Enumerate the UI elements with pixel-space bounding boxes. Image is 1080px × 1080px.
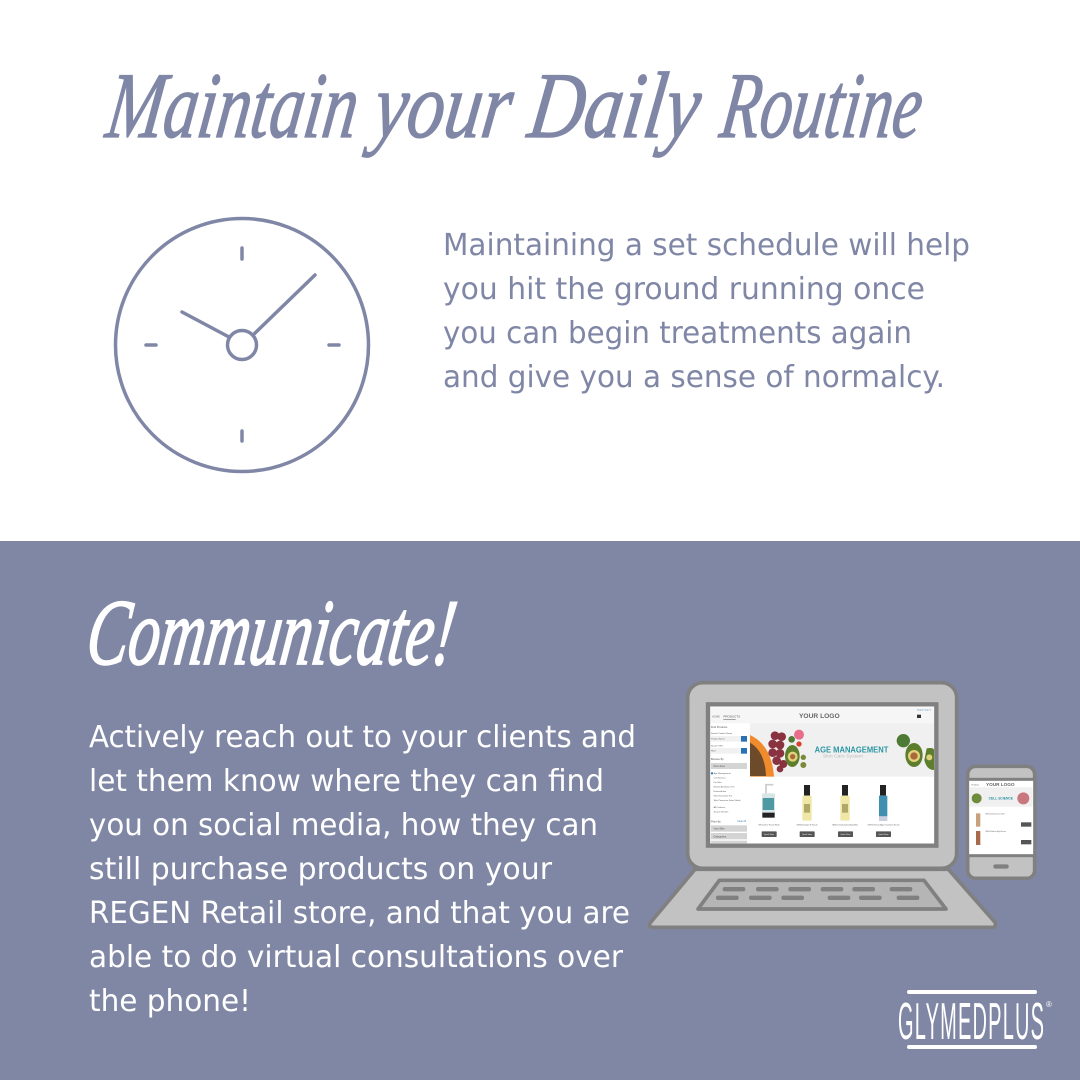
phone: Products xyxy=(971,783,979,786)
sidebar: SKU xyxy=(711,750,716,752)
product banner: Skin Care System xyxy=(823,754,863,760)
sidebar: Search SKU xyxy=(711,744,723,747)
phone: GM100 Retinol Night Serum xyxy=(985,830,1007,833)
laptop screen xyxy=(708,704,936,846)
text block: communicate: still purchase products on your xyxy=(89,852,553,887)
text block: communicate: REGEN Retail store, and that you are xyxy=(89,896,630,931)
product banner xyxy=(750,723,934,777)
product cards: Quick View xyxy=(878,834,889,836)
text block: communicate: let them know where they can find xyxy=(89,764,604,799)
product cards: Quick View xyxy=(764,834,775,836)
sidebar: Cell Science xyxy=(714,778,726,780)
text block: daily routine xyxy=(443,228,970,395)
phone xyxy=(968,766,1035,878)
sidebar: Retina Active xyxy=(714,790,727,793)
sidebar: Our Lines xyxy=(713,764,726,768)
laptop screen: PRODUCTS xyxy=(723,714,740,718)
title xyxy=(100,54,930,158)
text block: daily routine: Maintaining a set schedule will help xyxy=(443,228,970,263)
sidebar: Search Product Name xyxy=(711,732,733,735)
phone: GM100 Daily Science Mist xyxy=(985,812,1005,815)
text block: daily routine: you can begin treatments again xyxy=(443,316,912,351)
sidebar xyxy=(711,725,747,843)
laptop lid xyxy=(688,683,957,868)
laptop base xyxy=(649,869,995,927)
title: Routine xyxy=(714,54,930,158)
sidebar: Browse By xyxy=(711,757,724,761)
sidebar: Filter By xyxy=(711,819,721,823)
sidebar: For Men xyxy=(714,781,722,784)
title: Maintain xyxy=(100,54,366,158)
laptop screen: YOUR LOGO xyxy=(799,713,840,720)
sidebar: Clear All xyxy=(737,820,746,823)
panel: communicate xyxy=(0,541,1080,1080)
text block: communicate xyxy=(89,720,636,1019)
product cards: Quick View xyxy=(802,834,813,836)
sidebar: Your Skin xyxy=(713,827,725,831)
sidebar: Age Management xyxy=(714,772,731,775)
sidebar: Search Results xyxy=(714,811,728,814)
text block: daily routine: and give you a sense of normalcy. xyxy=(443,360,945,395)
text block: communicate: Actively reach out to your clients and xyxy=(89,720,636,755)
sidebar: All Products xyxy=(714,806,725,809)
keyboard xyxy=(698,880,946,909)
sidebar: Categories xyxy=(713,834,727,838)
sidebar: Find Products xyxy=(711,725,728,729)
text block: communicate: able to do virtual consultations over xyxy=(89,940,624,975)
sidebar: Product Name xyxy=(711,737,726,740)
sidebar: Master Aesthetics Pro xyxy=(714,786,735,789)
text block: daily routine: you hit the ground running once xyxy=(443,272,925,307)
laptop screen: Register Sign In xyxy=(917,708,931,711)
product banner: AGE MANAGEMENT xyxy=(815,744,888,754)
laptop screen: HOME xyxy=(712,714,720,718)
product cards: GM101 Daily Smoothing Mist xyxy=(832,824,858,827)
logo: GlyMed Plus: ® xyxy=(1046,1000,1052,1009)
sidebar: Skin Essentials Pro xyxy=(714,795,733,798)
text block: communicate: you on social media, how they can xyxy=(89,808,598,843)
title: your xyxy=(362,54,521,158)
phone: YOUR LOGO xyxy=(986,782,1015,787)
logo: GlyMed Plus: GLYMEDPLUS xyxy=(898,993,1044,1051)
product cards: Quick View xyxy=(840,834,851,836)
product cards: GM72 Renew Age Treatment Serum xyxy=(868,824,900,827)
heading: communicate: Communicate! xyxy=(81,581,463,685)
product cards: GM100 Daily Lift Serum xyxy=(796,824,818,827)
title: Daily xyxy=(521,54,708,158)
product cards xyxy=(758,785,900,837)
icon: clock xyxy=(116,218,368,472)
phone: CELL SCIENCE xyxy=(989,796,1014,800)
illustration: laptop xyxy=(649,683,1035,927)
text block: communicate: the phone! xyxy=(89,984,251,1019)
product cards: GM Calmer Facial Wash xyxy=(758,824,780,827)
sidebar: Skin Protection Solar Shield xyxy=(714,799,741,802)
